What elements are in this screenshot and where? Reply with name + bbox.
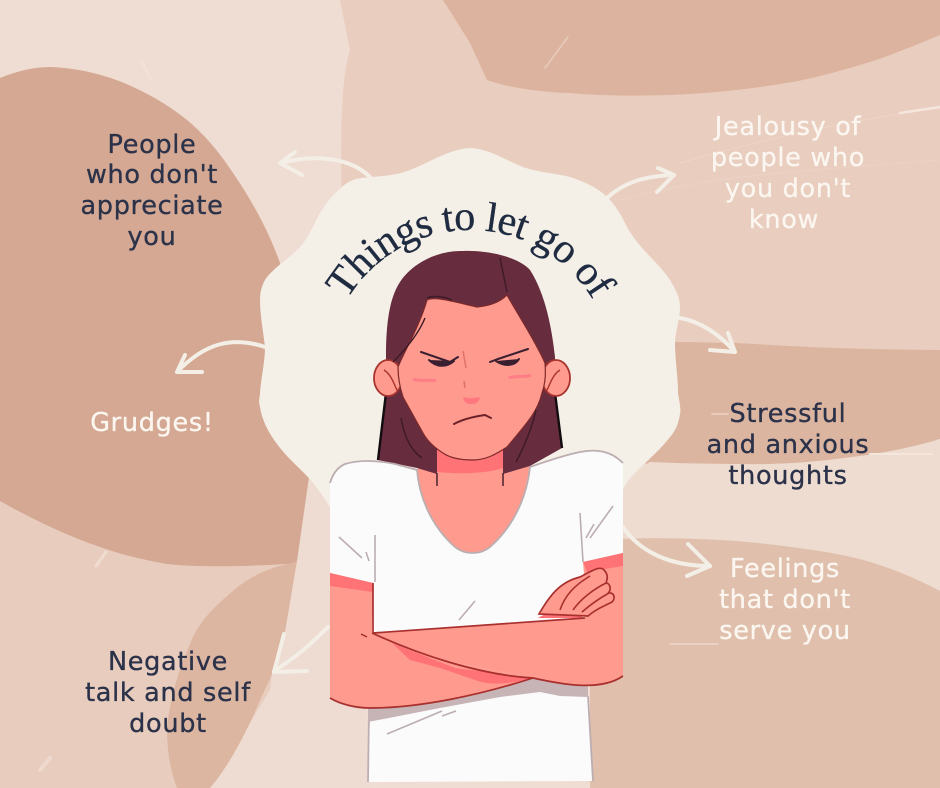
- badge: scalloped cream background: [259, 148, 680, 540]
- label: stressful thoughts: thoughts: [728, 461, 848, 491]
- hand: [539, 568, 614, 616]
- label: jealousy: people who: [711, 143, 865, 173]
- mouth: [454, 415, 491, 424]
- right arm: [372, 553, 623, 685]
- t-shirt: [330, 451, 623, 782]
- labels: [80, 112, 869, 739]
- label: grudges: Grudges!: [90, 408, 214, 438]
- arrow: to stressful thoughts: [680, 318, 735, 352]
- label: jealousy: Jealousy of: [713, 112, 862, 142]
- label: feelings: serve you: [719, 616, 851, 646]
- label: feelings: Feelings: [730, 554, 840, 584]
- ears: [374, 360, 570, 396]
- label: people who don't appreciate you: People: [108, 130, 196, 160]
- label: stressful thoughts: Stressful: [730, 399, 846, 429]
- label: jealousy: know: [749, 205, 819, 235]
- face: [398, 295, 545, 460]
- arrow: to grudges: [177, 342, 265, 372]
- shirt shadow: [368, 670, 588, 722]
- arrow: to feelings: [623, 527, 710, 576]
- arrow: to negative talk: [274, 627, 328, 672]
- character: angry woman with crossed arms: [330, 251, 623, 782]
- label: people who don't appreciate you: appreciate: [80, 191, 224, 221]
- label: people who don't appreciate you: you: [128, 222, 176, 252]
- arrow: to people who don't appreciate you: [280, 152, 370, 177]
- nose: [463, 397, 480, 404]
- arm shadows: [330, 553, 623, 684]
- label: stressful thoughts: and anxious: [707, 430, 869, 460]
- label: negative talk: Negative: [108, 647, 228, 677]
- label: feelings: that don't: [719, 585, 851, 615]
- eyes and brows: [421, 349, 528, 366]
- left arm: [330, 573, 533, 708]
- brow crease and blush: [463, 351, 466, 388]
- title: arched: Things to let go of: [324, 202, 618, 299]
- arm crease: [361, 634, 367, 637]
- neck: [417, 440, 530, 553]
- label: people who don't appreciate you: who don't: [86, 160, 218, 190]
- hair: [378, 251, 562, 474]
- shirt creases: [339, 506, 613, 734]
- arrow: to jealousy: [608, 168, 674, 197]
- label: jealousy: you don't: [725, 174, 851, 204]
- hair dark outline: [378, 393, 562, 460]
- neck shadow: [437, 445, 503, 473]
- arm outlines: [330, 583, 623, 708]
- shirt outline: [330, 451, 623, 782]
- arrows: [177, 152, 735, 672]
- fingers: [560, 576, 609, 612]
- label: negative talk: talk and self: [85, 678, 251, 708]
- hair strands: [393, 258, 536, 486]
- label: negative talk: doubt: [129, 709, 207, 739]
